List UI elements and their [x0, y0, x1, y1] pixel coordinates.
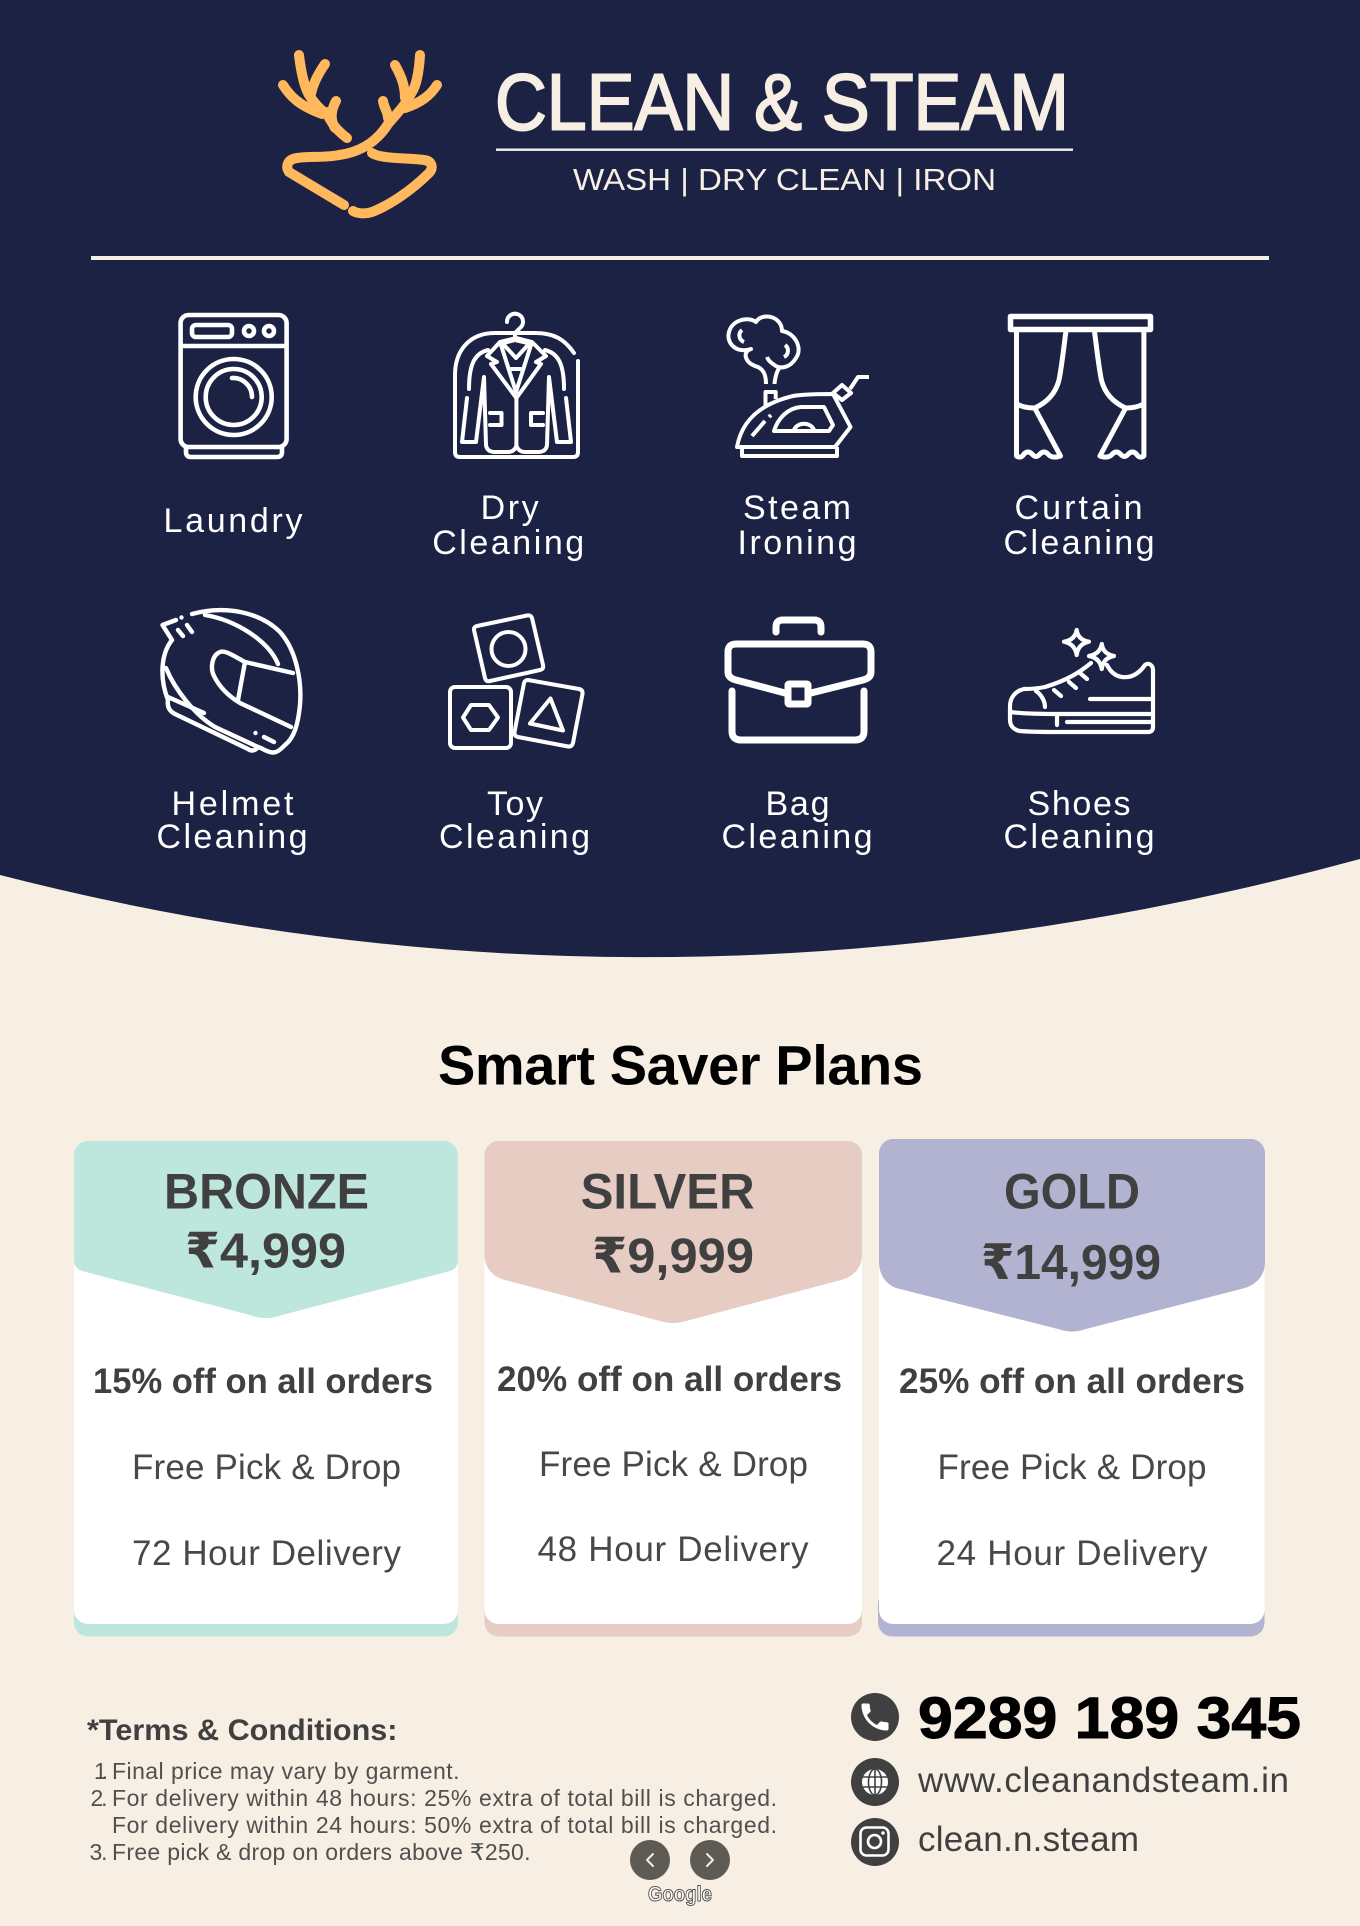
label: [1004, 785, 1154, 856]
pick and drop: Free Pick & Drop: [132, 1448, 401, 1487]
terms heading: *Terms & Conditions:: [87, 1714, 398, 1747]
service: helmet cleaning: [156, 610, 308, 856]
label: Toy: [487, 785, 543, 823]
tagline: WASH | DRY CLEAN | IRON: [573, 162, 996, 197]
contact: instagram: [851, 1818, 1139, 1866]
terms list: 3.: [90, 1839, 108, 1865]
google watermark: Google: [648, 1883, 712, 1906]
service: bag cleaning: [722, 620, 872, 856]
silver header ribbon: [484, 1141, 862, 1323]
icon: washing machine: [181, 315, 287, 457]
label: Cleaning: [432, 524, 584, 562]
contact: website: [851, 1758, 1289, 1806]
phone number: 9289 189 345: [918, 1686, 1301, 1751]
terms list: [90, 1758, 777, 1865]
label: Cleaning: [722, 818, 872, 856]
discount: 25% off on all orders: [899, 1362, 1245, 1401]
plan card: gold: [878, 1139, 1265, 1636]
label: Cleaning: [1004, 818, 1154, 856]
plan name: BRONZE: [164, 1164, 369, 1220]
label: [432, 489, 584, 562]
icon: briefcase: [728, 620, 871, 740]
icon: instagram: [851, 1818, 899, 1866]
terms list: For delivery within 48 hours: 25% extra of total bill is charged.: [112, 1785, 777, 1811]
label: [1004, 489, 1154, 562]
panel: navy header background with curved bottom: [0, 0, 1360, 957]
service: shoes cleaning: [1004, 630, 1154, 856]
icon: phone: [851, 1693, 899, 1741]
label: Cleaning: [439, 818, 590, 856]
plan name: SILVER: [581, 1164, 755, 1220]
icon: steam iron: [728, 316, 869, 456]
pick and drop: Free Pick & Drop: [539, 1445, 808, 1484]
website address: www.cleanandsteam.in: [917, 1761, 1289, 1800]
pick and drop: Free Pick & Drop: [938, 1448, 1206, 1487]
label: Cleaning: [156, 818, 308, 856]
terms list: Free pick & drop on orders above ₹250.: [112, 1839, 530, 1865]
plan card: silver: [484, 1141, 862, 1636]
label: Steam: [743, 489, 851, 527]
terms list: 2.: [90, 1785, 108, 1811]
plan name: GOLD: [1004, 1164, 1140, 1220]
service: toy cleaning: [439, 615, 590, 856]
plan card: bronze: [74, 1141, 458, 1636]
label: Helmet: [172, 785, 294, 823]
service: dry cleaning: [432, 314, 584, 562]
terms list: Final price may vary by garment.: [112, 1758, 460, 1784]
icon: toy blocks: [450, 615, 583, 748]
label: Laundry: [164, 502, 302, 540]
bronze header ribbon: [74, 1141, 458, 1318]
logo underline: [496, 148, 1073, 151]
label: Curtain: [1014, 489, 1142, 527]
delivery: 24 Hour Delivery: [936, 1534, 1208, 1573]
carousel next button: [690, 1840, 730, 1880]
terms list: For delivery within 24 hours: 50% extra of total bill is charged.: [112, 1812, 777, 1838]
label: [156, 785, 308, 856]
icon: sneaker with sparkles: [1010, 630, 1153, 732]
label: [722, 785, 872, 856]
label: Ironing: [738, 524, 856, 562]
gold header ribbon: [879, 1139, 1265, 1332]
price: ₹4,999: [185, 1224, 346, 1278]
heading: smart saver plans: Smart Saver Plans: [438, 1034, 923, 1096]
icon: globe: [851, 1758, 899, 1806]
contact: phone: [851, 1686, 1301, 1751]
terms list: 1.: [94, 1758, 108, 1784]
price: ₹9,999: [592, 1230, 754, 1284]
delivery: 72 Hour Delivery: [132, 1534, 402, 1573]
logo title: CLEAN & STEAM: [495, 58, 1069, 146]
label: Shoes: [1028, 785, 1130, 823]
service: steam ironing: [728, 316, 869, 562]
discount: 20% off on all orders: [497, 1360, 842, 1399]
label: [439, 785, 590, 856]
service: curtain cleaning: [1004, 316, 1154, 562]
carousel previous button: [630, 1840, 670, 1880]
label: [738, 489, 856, 562]
label: Dry: [481, 489, 539, 527]
service: laundry: [164, 315, 302, 540]
icon: suit in garment bag: [455, 314, 578, 457]
instagram handle: clean.n.steam: [918, 1820, 1139, 1859]
discount: 15% off on all orders: [93, 1362, 433, 1401]
icon: helmet: [162, 610, 300, 753]
label: Cleaning: [1004, 524, 1154, 562]
icon: curtains: [1010, 316, 1150, 457]
icon: antler logo: [283, 55, 437, 213]
delivery: 48 Hour Delivery: [538, 1530, 809, 1569]
price: ₹14,999: [981, 1236, 1161, 1290]
label: Bag: [766, 785, 830, 823]
